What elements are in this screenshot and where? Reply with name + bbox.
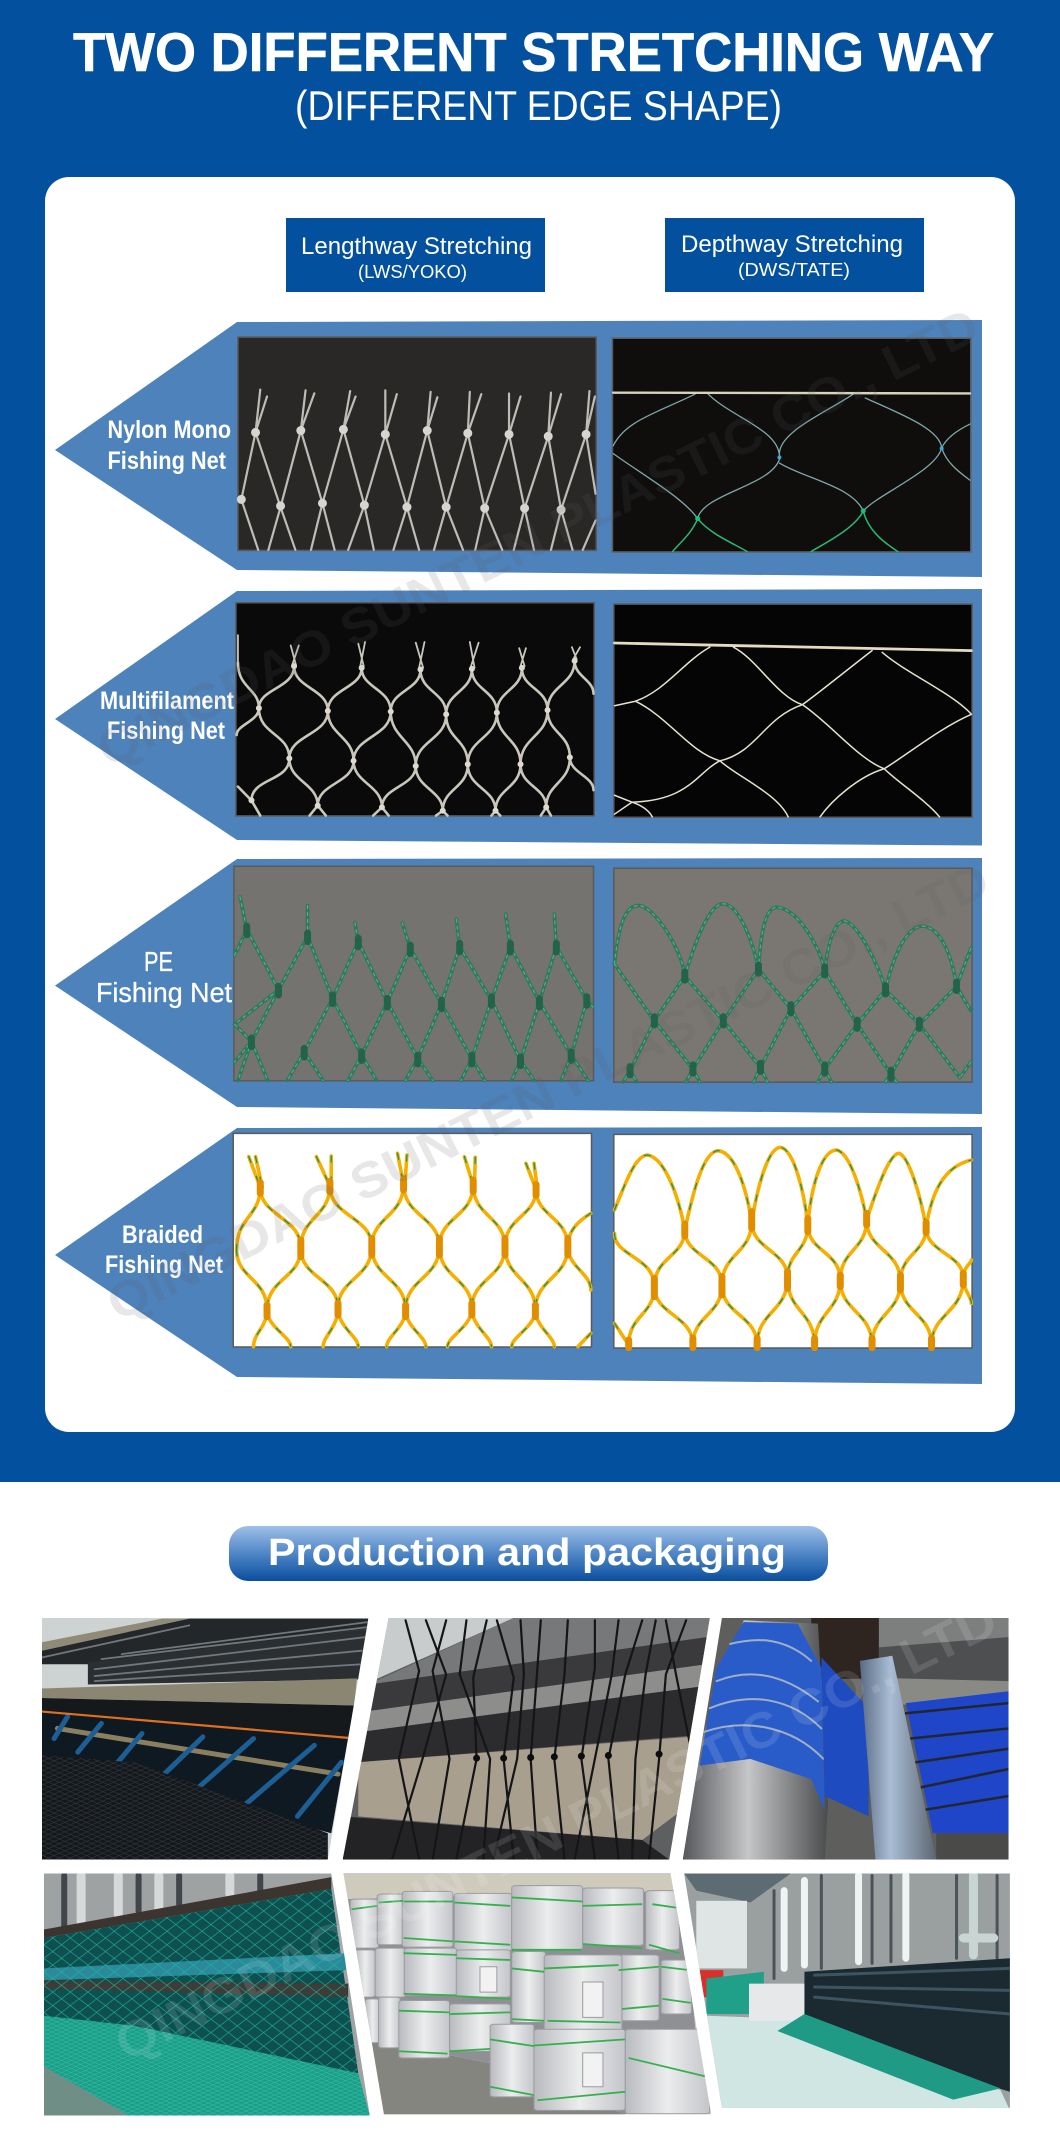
label: PE: PE [144,946,173,977]
section heading pill: production and packaging [229,1526,828,1581]
photo: close-up of black net on rollers [341,1618,713,1861]
watermark: upper: QINGDAO SUNTEN PLASTIC CO., LTD [88,297,988,778]
arrow band: braided [55,1127,982,1384]
column header: depthway stretching: Depthway Stretching [681,231,903,258]
title: TWO DIFFERENT STRETCHING WAY [73,21,994,83]
net photo: nylon mono depthway [612,338,971,552]
row: PE fishing net [55,858,982,1114]
column header: depthway stretching: (DWS/TATE) [738,260,850,280]
label: multifilament: Fishing Net [107,717,226,745]
net photo: PE depthway [614,868,972,1082]
label: braided [105,1221,224,1279]
column header: lengthway stretching [286,218,545,292]
blue header background [0,0,1060,1482]
net photo: braided depthway [614,1134,972,1348]
watermark: photo grid: QINGDAO SUNTEN PLASTIC CO., LTD [106,1591,1006,2072]
photo: factory hall [683,1873,1014,2110]
net photo: braided lengthway [233,1133,592,1347]
section heading pill: production and packaging: Production and packaging [268,1532,786,1574]
net photo: multifilament lengthway [236,603,594,816]
label: multifilament [100,687,235,745]
row: multifilament fishing net [55,589,982,846]
label: nylon mono: Fishing Net [108,447,227,475]
column header: lengthway stretching: Lengthway Stretching [301,233,532,260]
label: PE: Fishing Net [96,977,232,1008]
label: braided: Fishing Net [105,1251,224,1279]
arrow band: PE [55,858,982,1114]
net photo: PE lengthway [234,866,594,1081]
label: nylon mono: Nylon Mono [108,416,231,444]
label: nylon mono [108,416,231,475]
row: nylon mono fishing net [55,320,982,577]
photo: netting machine black net [42,1618,373,1861]
photo grid: production and packaging [42,1618,1014,2117]
subtitle: (DIFFERENT EDGE SHAPE) [295,82,782,129]
watermark: lower: QINGDAO SUNTEN PLASTIC CO., LTD [98,851,998,1332]
photo: blue tape on steel rollers [683,1618,1014,1861]
photo: teal net on machine [44,1873,375,2117]
column header: depthway stretching [665,218,924,292]
photo: white packaged bales [341,1873,717,2117]
panel: white comparison card [45,177,1015,1432]
net photo: nylon mono lengthway [238,337,596,550]
label: multifilament: Multifilament [100,687,235,715]
row: braided fishing net [55,1127,982,1384]
arrow band: nylon mono [55,320,982,577]
label: braided: Braided [122,1221,203,1249]
net photo: multifilament depthway [614,604,972,817]
column header: lengthway stretching: (LWS/YOKO) [358,262,467,282]
arrow band: multifilament [55,589,982,846]
label: PE [96,946,232,1008]
